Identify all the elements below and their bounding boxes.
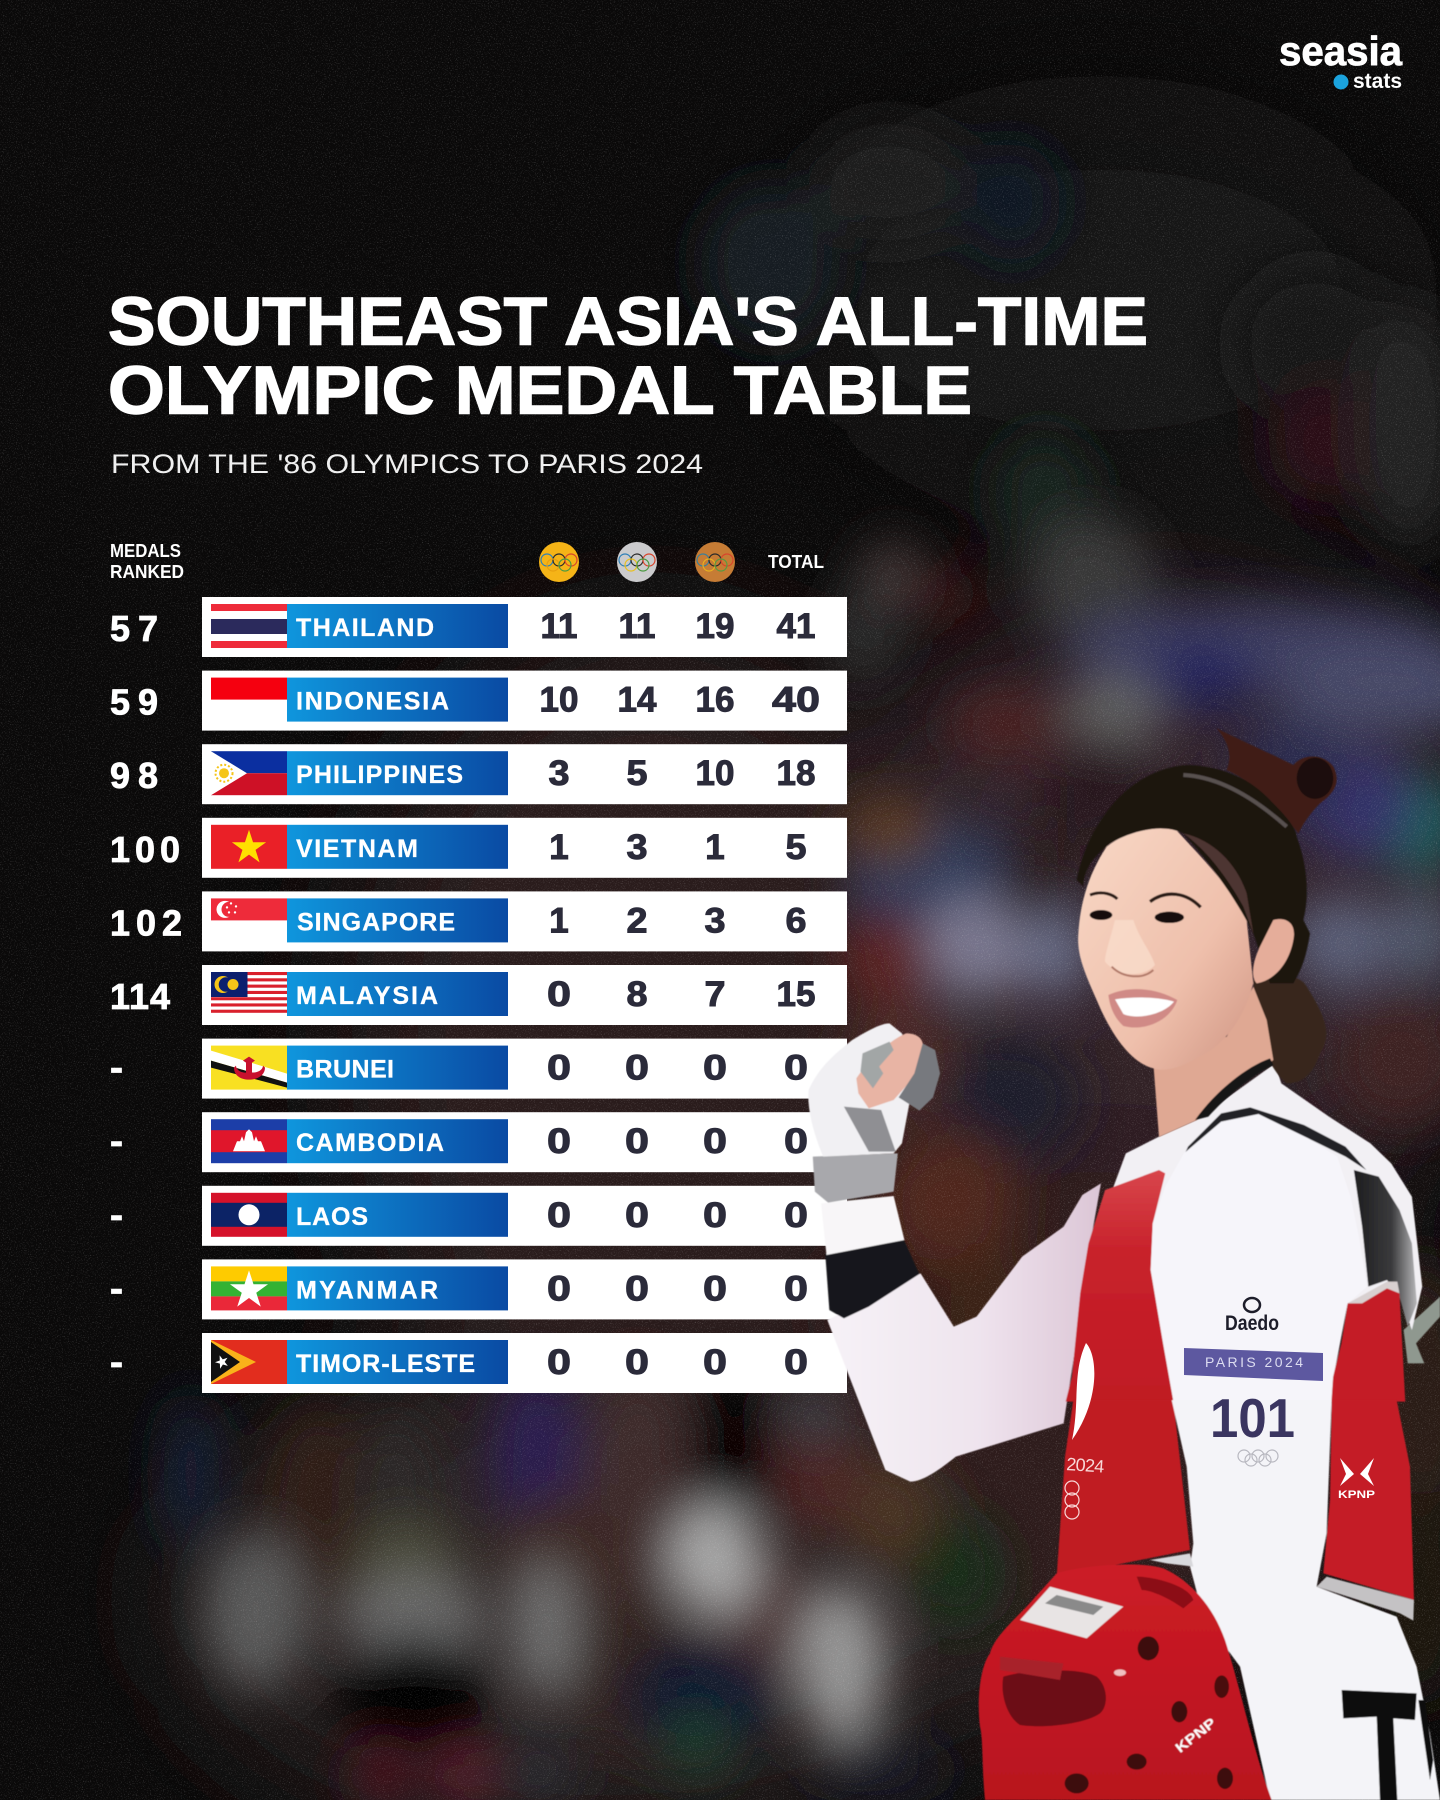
row: Indonesia: 59: [110, 682, 158, 723]
title: OLYMPIC MEDAL TABLE: [108, 352, 972, 428]
athlete: sponsor marks on the uniform: PARIS 2024: [1205, 1354, 1303, 1370]
row: Timor-Leste: [110, 1333, 847, 1393]
row: Malaysia: MALAYSIA: [296, 982, 438, 1010]
row: Vietnam: 1: [705, 828, 725, 867]
title: [108, 284, 1148, 428]
row: Philippines: 5: [626, 754, 648, 793]
row: Myanmar: 0: [784, 1269, 808, 1308]
row: Timor-Leste: TIMOR-LESTE: [296, 1350, 475, 1378]
row: Myanmar: [110, 1259, 847, 1319]
subtitle: FROM THE '86 OLYMPICS TO PARIS 2024: [111, 449, 703, 479]
row: Laos: -: [110, 1194, 123, 1235]
column heading: total: TOTAL: [768, 552, 824, 572]
row: Laos: [110, 1186, 847, 1246]
athlete: sponsor marks on the uniform: [1065, 1298, 1375, 1519]
row: Philippines: 18: [777, 754, 815, 793]
logo: seasia stats: stats: [1353, 70, 1402, 93]
row: Vietnam: 3: [626, 828, 648, 867]
flag: Cambodia: [211, 1119, 287, 1163]
row: Vietnam: [110, 818, 847, 878]
logo: seasia stats: seasia: [1279, 28, 1403, 74]
row: Brunei: 0: [784, 1049, 808, 1088]
row: Indonesia: [110, 671, 847, 731]
row: Laos: 0: [547, 1196, 571, 1235]
row: Singapore: 2: [626, 901, 648, 940]
athlete: sponsor marks on the uniform: KPNP: [1338, 1489, 1375, 1501]
icon: gold medal: [539, 542, 579, 582]
column heading: medals ranked: RANKED: [110, 562, 184, 582]
row: Vietnam: 100: [110, 829, 180, 870]
icon: silver medal: [617, 542, 657, 582]
row: Thailand: 57: [110, 608, 158, 649]
row: Laos: LAOS: [296, 1203, 368, 1231]
row: Myanmar: -: [110, 1267, 123, 1308]
row: Thailand: 11: [540, 607, 578, 646]
row: Myanmar: MYANMAR: [296, 1276, 438, 1304]
row: Indonesia: 40: [772, 681, 820, 720]
row: Brunei: 0: [625, 1049, 649, 1088]
row: Myanmar: 0: [547, 1269, 571, 1308]
row: Laos: 0: [625, 1196, 649, 1235]
row: Timor-Leste: 0: [625, 1343, 649, 1382]
flag: Malaysia: [211, 972, 287, 1016]
row: Brunei: 0: [547, 1049, 571, 1088]
row: Thailand: 41: [777, 607, 815, 646]
athlete: lower vest, trousers and helmet: [979, 1400, 1440, 1800]
row: Brunei: [110, 1039, 847, 1099]
row: Malaysia: 8: [626, 975, 648, 1014]
row: Cambodia: CAMBODIA: [296, 1129, 444, 1157]
row: Singapore: SINGAPORE: [297, 908, 455, 936]
flag: Philippines: [211, 751, 287, 795]
flag: Laos: [211, 1193, 287, 1237]
row: Brunei: BRUNEI: [296, 1056, 394, 1084]
column heading: medals ranked: [110, 541, 184, 582]
row: Laos: 0: [703, 1196, 727, 1235]
row: Singapore: 3: [704, 901, 726, 940]
row: Thailand: 11: [618, 607, 656, 646]
row: Cambodia: 0: [547, 1122, 571, 1161]
row: Philippines: 3: [548, 754, 570, 793]
row: Cambodia: 0: [625, 1122, 649, 1161]
flag: Thailand: [211, 604, 287, 648]
row: Philippines: PHILIPPINES: [296, 761, 463, 789]
athlete: sponsor marks on the uniform: Daedo: [1225, 1312, 1279, 1335]
row: Vietnam: 5: [786, 828, 806, 867]
row: Singapore: [110, 891, 847, 951]
flag: Brunei: [211, 1046, 287, 1090]
row: Indonesia: 10: [540, 681, 578, 720]
athlete: neck, hair and face: [1077, 728, 1337, 1137]
row: Timor-Leste: 0: [703, 1343, 727, 1382]
row: Malaysia: 114: [110, 976, 170, 1017]
row: Malaysia: 15: [777, 975, 815, 1014]
row: Indonesia: 14: [618, 681, 657, 720]
row: Philippines: 10: [696, 754, 734, 793]
flag: Vietnam: [211, 825, 287, 869]
row: Laos: 0: [784, 1196, 808, 1235]
row: Cambodia: -: [110, 1120, 123, 1161]
row: Thailand: 19: [696, 607, 734, 646]
flag: Singapore: [211, 898, 287, 920]
row: Indonesia: INDONESIA: [296, 688, 449, 716]
athlete: sponsor marks on the uniform: 2024: [1066, 1454, 1105, 1477]
row: Timor-Leste: 0: [784, 1343, 808, 1382]
row: Brunei: 0: [703, 1049, 727, 1088]
row: Singapore: 6: [786, 901, 806, 940]
row: Indonesia: 16: [696, 681, 734, 720]
row: Cambodia: 0: [784, 1122, 808, 1161]
flag: Myanmar: [211, 1266, 287, 1310]
row: Cambodia: 0: [703, 1122, 727, 1161]
row: Vietnam: 1: [549, 828, 569, 867]
row: Thailand: THAILAND: [296, 614, 434, 642]
title: SOUTHEAST ASIA'S ALL-TIME: [108, 284, 1148, 360]
athlete: upper body, arm and glove: [808, 1023, 1440, 1482]
icon: bronze medal: [695, 542, 735, 582]
row: Philippines: 98: [110, 755, 158, 796]
row: Thailand: [110, 597, 847, 657]
row: Myanmar: 0: [703, 1269, 727, 1308]
row: Brunei: -: [110, 1047, 123, 1088]
row: Timor-Leste: -: [110, 1341, 123, 1382]
athlete: lower vest, trousers and helmet: KPNP: [1172, 1714, 1219, 1756]
row: Philippines: [110, 744, 847, 804]
athlete: sponsor marks on the uniform: 101: [1210, 1387, 1295, 1449]
column heading: medals ranked: MEDALS: [110, 541, 181, 561]
row: Timor-Leste: 0: [547, 1343, 571, 1382]
row: Malaysia: [110, 965, 847, 1025]
row: Malaysia: 7: [704, 975, 726, 1014]
row: Vietnam: VIETNAM: [296, 835, 418, 863]
row: Singapore: 1: [549, 901, 569, 940]
row: Cambodia: [110, 1112, 847, 1172]
flag: Timor-Leste: [211, 1340, 287, 1384]
row: Singapore: 102: [110, 902, 182, 943]
athlete: taekwondo competitor: [808, 728, 1440, 1800]
row: Myanmar: 0: [625, 1269, 649, 1308]
flag: Indonesia: [211, 678, 287, 722]
row: Malaysia: 0: [547, 975, 571, 1014]
